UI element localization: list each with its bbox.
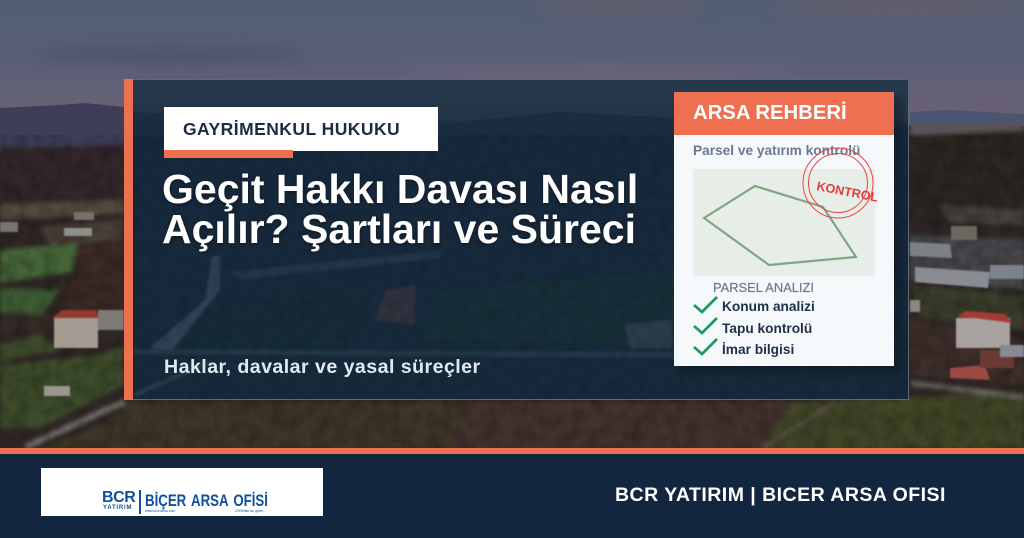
logo tagline: 2009'dan bu güne... — [235, 509, 266, 513]
icon: check — [693, 338, 718, 356]
panel: arsa rehberi card — [674, 92, 894, 366]
title: Açılır? Şartları ve Süreci — [162, 206, 636, 252]
footer — [0, 448, 1024, 538]
accent bar: panel left edge — [124, 79, 133, 400]
logo name: BİÇER ARSA OFİSİ — [145, 491, 268, 510]
card header text: ARSA REHBERİ — [693, 102, 847, 124]
logo Yatirim: YATIRIM — [103, 505, 132, 511]
logo box — [41, 468, 323, 516]
checklist item 2 — [693, 317, 812, 336]
icon: check — [693, 317, 718, 335]
tag orange underline — [164, 150, 293, 158]
category tag — [164, 107, 438, 158]
houses and buildings — [0, 212, 1024, 396]
title — [162, 166, 638, 253]
item text: İmar bilgisi — [722, 342, 794, 357]
logo BCR: BCR — [102, 489, 135, 506]
logo divider — [139, 490, 140, 514]
tag white background — [164, 107, 438, 151]
item text: Tapu kontrolü — [722, 321, 812, 336]
analysis heading: PARSEL ANALIZI — [713, 280, 814, 295]
distant hills — [0, 103, 1024, 152]
icon: check — [693, 296, 718, 314]
checklist item 1 — [693, 296, 815, 314]
parcel map: KONTROL — [815, 179, 880, 205]
card subtitle: Parsel ve yatırım kontrolü — [693, 143, 860, 158]
parcel map — [693, 148, 880, 276]
footer orange line — [0, 448, 1024, 454]
tag text: GAYRİMENKUL HUKUKU — [183, 119, 400, 139]
item text: Konum analizi — [722, 299, 815, 314]
subtitle: Haklar, davalar ve yasal süreçler — [164, 356, 481, 378]
checklist item 3 — [693, 338, 794, 357]
parcel outline — [704, 186, 856, 265]
panel: main dark overlay — [124, 79, 909, 400]
footer right text: BCR YATIRIM | BICER ARSA OFISI — [615, 484, 946, 506]
card header — [674, 92, 894, 135]
logo website: www.bicerarsa.com — [145, 509, 175, 513]
faint photo inside panel — [133, 80, 908, 399]
panel: card shadow — [680, 98, 902, 373]
title: Geçit Hakkı Davası Nasıl — [162, 166, 638, 212]
stamp — [803, 148, 873, 218]
